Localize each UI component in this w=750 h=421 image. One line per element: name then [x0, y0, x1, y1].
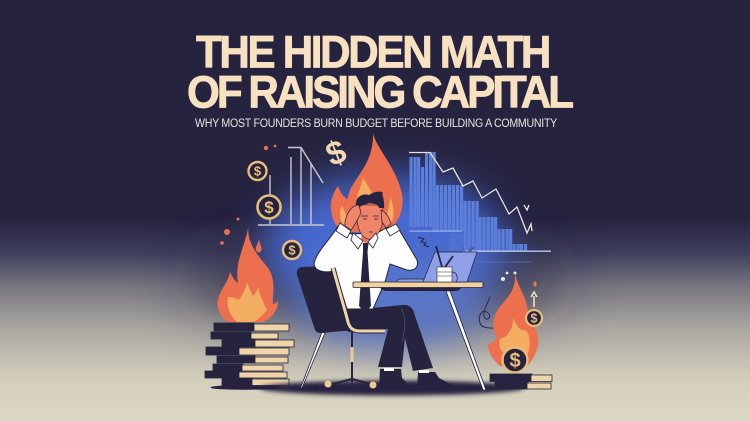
- icon: coin lower left: $: [288, 242, 296, 258]
- icon: small coin right: [526, 310, 542, 326]
- title: OF RAISING CAPITAL: [187, 66, 574, 118]
- icon: small coin right: $: [531, 312, 538, 326]
- person: [314, 192, 452, 389]
- subtitle: WHY MOST FOUNDERS BURN BUDGET BEFORE BUILDING A COMMUNITY: [195, 118, 558, 130]
- hands: [345, 205, 361, 230]
- desk: [353, 282, 486, 390]
- book stack left: [205, 323, 294, 389]
- flame behind head: [331, 133, 403, 232]
- sparks and arrow right: [501, 272, 537, 307]
- icon: coin top left: [248, 162, 266, 180]
- icon: coin lower left: [283, 241, 301, 259]
- chair legs: [300, 332, 325, 388]
- chair: [297, 267, 376, 388]
- squiggle mark: [418, 237, 429, 247]
- declining line: [409, 152, 532, 233]
- right bar chart: [409, 152, 551, 262]
- cuffs: [336, 223, 400, 238]
- icon: coin top left: $: [254, 164, 262, 178]
- hair: [356, 192, 384, 209]
- shirt: [314, 226, 417, 309]
- collar: [351, 233, 378, 249]
- scribble: [479, 297, 495, 328]
- trousers and shoes: [342, 305, 452, 389]
- chair arm band: [333, 268, 385, 331]
- tie: [359, 243, 371, 313]
- icon: large coin right: $: [509, 350, 521, 372]
- icon: large coin right: [502, 348, 528, 372]
- book stack right: [490, 374, 552, 389]
- neck and face: [361, 232, 374, 244]
- icon: coin middle left: $: [264, 198, 274, 217]
- title: [187, 26, 574, 118]
- icon: coin middle left: [258, 196, 280, 218]
- icon: floating dollar sign: $: [320, 132, 351, 173]
- embers left: [220, 145, 276, 252]
- flame on books left: [217, 223, 278, 322]
- floor shadow: [260, 380, 524, 396]
- laptop and pen cup: [397, 246, 477, 282]
- facial features: [361, 216, 379, 232]
- left line chart: [258, 148, 324, 225]
- title: THE HIDDEN MATH: [196, 26, 549, 78]
- chair back: [297, 267, 356, 333]
- flame right: [488, 273, 538, 366]
